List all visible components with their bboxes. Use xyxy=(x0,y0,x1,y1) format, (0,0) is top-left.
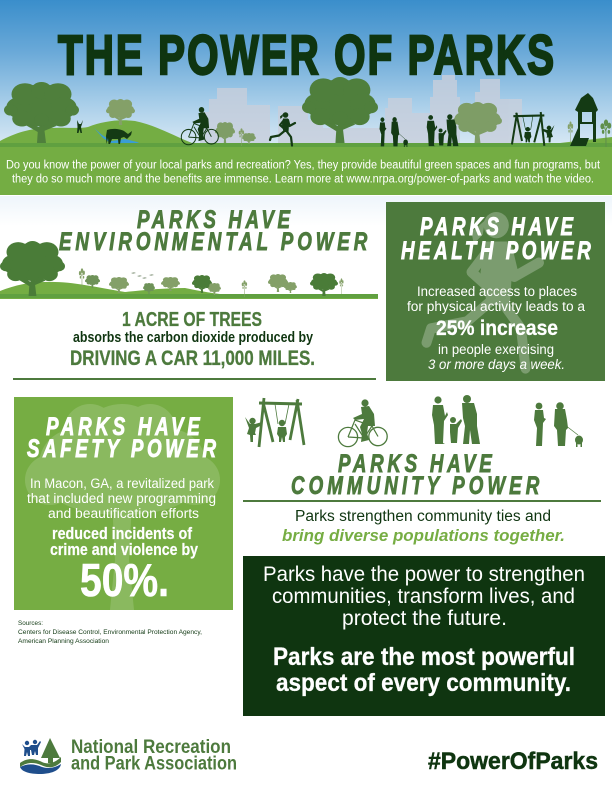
community heading xyxy=(291,449,539,500)
tree: sapling xyxy=(239,128,244,146)
sources: Sources: xyxy=(18,620,43,627)
landscape illustration xyxy=(0,77,612,150)
stat: absorbs: absorbs the carbon dioxide produced by xyxy=(73,330,313,346)
community highlight: bring diverse populations together. xyxy=(282,526,565,545)
panel: community power xyxy=(243,395,601,545)
stat: driving: DRIVING A CAR 11,000 MILES. xyxy=(70,347,315,370)
community heading: COMMUNITY POWER xyxy=(291,471,539,500)
hashtag: #PowerOfParks xyxy=(428,748,598,775)
community text: Parks strengthen community ties and xyxy=(295,508,551,525)
tree: large centre xyxy=(302,77,378,143)
environmental heading xyxy=(59,205,367,256)
panel: health power xyxy=(386,202,605,381)
closing text: protect the future. xyxy=(342,607,507,630)
safety heading: PARKS HAVE xyxy=(46,412,201,441)
panel: closing statement xyxy=(243,556,605,716)
safety text: and beautification efforts xyxy=(48,506,199,521)
health text xyxy=(407,284,585,372)
icon: runner ghost xyxy=(426,212,539,368)
tree line illustration xyxy=(0,241,378,299)
safety text: crime and violence by xyxy=(50,540,198,559)
safety text: reduced incidents of xyxy=(52,524,192,543)
sources xyxy=(18,620,202,645)
icon: family xyxy=(432,395,480,444)
health text: in people exercising xyxy=(438,342,554,357)
header sky background xyxy=(0,0,612,148)
deer: drinking xyxy=(106,129,132,144)
family group xyxy=(427,114,458,146)
health text: 25% increase xyxy=(436,317,558,340)
health text: Increased access to places xyxy=(417,284,577,299)
tree: small round xyxy=(242,133,256,144)
cyclist xyxy=(181,107,218,145)
closing emphasis: aspect of every community. xyxy=(276,669,571,697)
safety heading xyxy=(27,412,216,463)
safety text: that included new programming xyxy=(27,491,216,506)
closing emphasis: Parks are the most powerful xyxy=(273,643,575,671)
river xyxy=(94,128,146,146)
safety text xyxy=(27,476,216,559)
sources: American Planning Association xyxy=(18,638,109,645)
intro band xyxy=(0,147,612,195)
icon: cyclist xyxy=(338,399,387,447)
woman and dog xyxy=(380,117,408,147)
runner xyxy=(270,112,295,146)
health heading: PARKS HAVE xyxy=(420,212,574,241)
community heading: PARKS HAVE xyxy=(338,449,493,478)
sources: Centers for Disease Control, Environmental Protection Agency, xyxy=(18,629,202,636)
grass strip xyxy=(0,143,612,148)
environmental heading: PARKS HAVE xyxy=(137,205,291,234)
icon: tree ghost xyxy=(25,404,220,610)
stat: one acre: 1 ACRE OF TREES xyxy=(122,309,262,331)
deer: small xyxy=(77,120,83,133)
page fade under band xyxy=(0,196,612,226)
city skyline xyxy=(200,75,522,147)
safety text: In Macon, GA, a revitalized park xyxy=(30,476,214,491)
tree: large left xyxy=(4,82,79,143)
intro text line 2: they do so much more and the benefits are immense. Learn more at www.nrpa.org/power-of-parks and watch the video. xyxy=(12,174,594,186)
tree: hill xyxy=(106,99,135,125)
environmental heading: ENVIRONMENTAL POWER xyxy=(59,227,367,256)
logo text xyxy=(71,736,237,774)
hills and ground xyxy=(0,120,612,150)
divider xyxy=(13,378,376,380)
safety heading: SAFETY POWER xyxy=(27,434,216,463)
divider xyxy=(243,500,601,502)
tree: small behind cyclist xyxy=(215,122,235,143)
health text: for physical activity leads to a xyxy=(407,299,585,314)
icon: woman and dog xyxy=(534,402,583,447)
swing set xyxy=(512,112,554,146)
title: THE POWER OF PARKS xyxy=(58,25,554,87)
stat: 50 percent: 50%. xyxy=(80,554,169,606)
panel: safety power xyxy=(14,397,233,610)
logo: NRPA xyxy=(20,736,237,774)
health heading xyxy=(401,212,591,265)
health heading: HEALTH POWER xyxy=(401,236,591,265)
icon: swing set xyxy=(245,398,304,447)
tree: light right xyxy=(453,102,502,143)
closing text: communities, transform lives, and xyxy=(272,585,575,608)
closing text xyxy=(263,563,585,630)
tree: edge xyxy=(600,120,611,147)
tree: sapling right xyxy=(568,121,573,143)
health text: 3 or more days a week. xyxy=(428,357,565,372)
logo text: and Park Association xyxy=(71,752,237,774)
closing emphasis xyxy=(273,643,575,697)
play structure xyxy=(570,93,598,146)
panel: environmental power xyxy=(0,205,378,380)
logo text: National Recreation xyxy=(71,736,231,758)
icon: NRPA mark xyxy=(20,738,61,774)
closing text: Parks have the power to strengthen xyxy=(263,563,585,586)
